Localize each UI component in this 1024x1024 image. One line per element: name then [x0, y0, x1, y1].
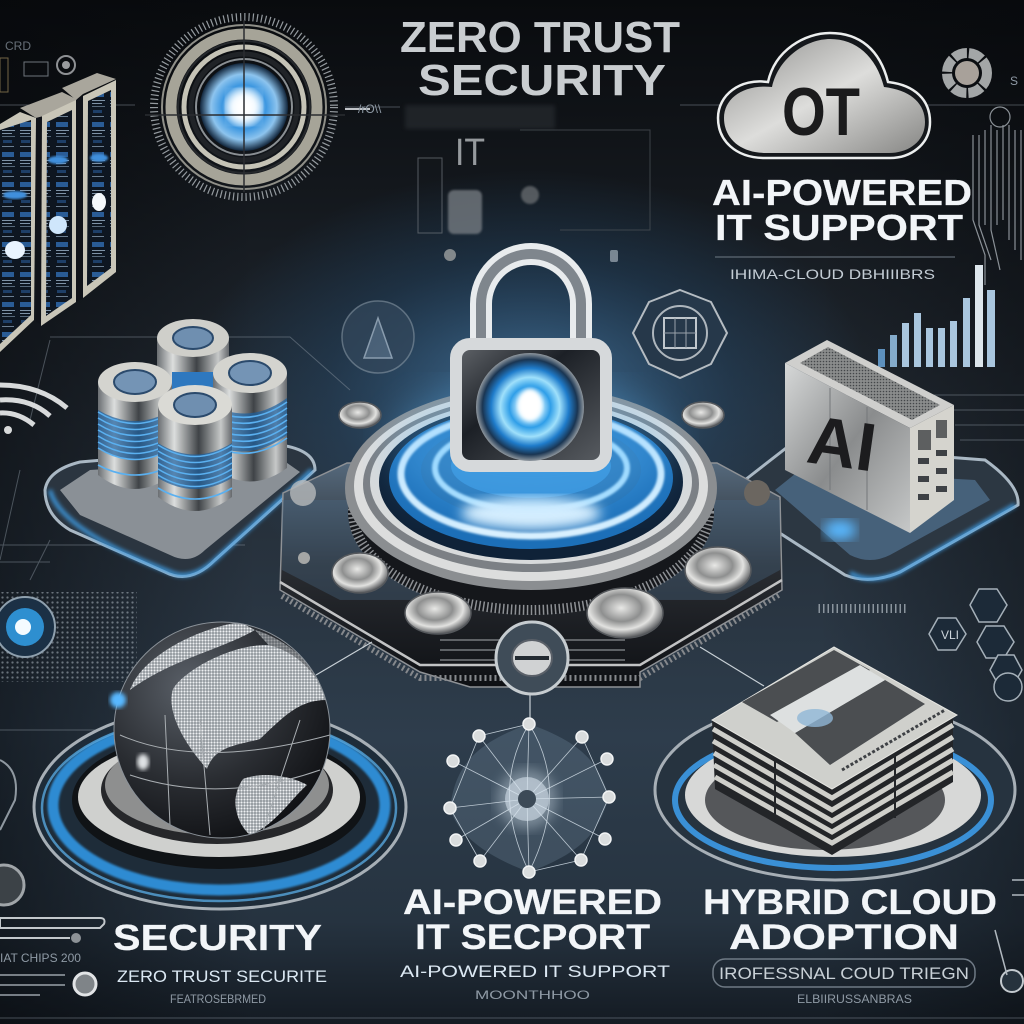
icon: target security eye: /rO\\ [358, 102, 382, 116]
title: Zero Trust Security: ZERO TRUST [400, 13, 680, 62]
hexagon icons [929, 589, 1022, 701]
caption: Hybrid cloud adoption [703, 883, 997, 1006]
bar chart [878, 265, 995, 367]
caption: Security: FEATROSEBRMED [170, 992, 266, 1006]
padlock body [456, 344, 606, 466]
title: Zero Trust Security: SECURITY [418, 56, 666, 105]
concentric rings [345, 385, 717, 614]
stack platform [655, 700, 1015, 880]
cylinder front [158, 385, 232, 511]
cylinder stack [98, 319, 287, 511]
globe platform [34, 705, 406, 909]
caption: AI-powered IT secport: IT SECPORT [415, 918, 650, 957]
caption: AI-powered IT secport: AI-POWERED [403, 883, 662, 922]
hexagon icons: VLI [941, 628, 959, 642]
right AI server platform [745, 445, 1018, 579]
central blue glow [190, 170, 870, 610]
AI server box [785, 340, 954, 533]
faded IT schematic [405, 105, 650, 262]
connector lines [316, 642, 764, 724]
rack 2 [20, 92, 78, 326]
heading: AI-powered IT support [712, 172, 972, 282]
caption: Hybrid cloud adoption: IROFESSNAL COUD TRIEGN [719, 964, 969, 983]
faded IT schematic: IT [455, 132, 485, 174]
left instrument details [0, 760, 104, 995]
left instrument details: IAT CHIPS 200 [0, 951, 81, 965]
caption: AI-powered IT secport [400, 883, 670, 1002]
cylinder right [213, 353, 287, 482]
caption: Hybrid cloud adoption: HYBRID CLOUD [703, 883, 997, 922]
rack 1 [0, 112, 36, 352]
faded shield circle icon [342, 301, 414, 373]
icon: segmented disc [947, 53, 1018, 93]
small diagram top-left: CRD [5, 39, 31, 53]
vertical cable bundle [973, 107, 1021, 285]
cylinder left [98, 362, 172, 489]
lens knob [496, 622, 568, 694]
network diagram [444, 718, 615, 878]
caption: Security [113, 917, 327, 1006]
cylinder back [157, 319, 229, 394]
knobs [332, 402, 751, 638]
caption: Hybrid cloud adoption: ADOPTION [729, 918, 959, 957]
caption: Security: ZERO TRUST SECURITE [117, 967, 327, 986]
caption: AI-powered IT secport: AI-POWERED IT SUPPORT [400, 962, 670, 981]
caption: Hybrid cloud adoption: ELBIIRUSSANBRAS [797, 992, 912, 1006]
icon: wifi [0, 385, 67, 434]
heading: AI-powered IT support: AI-POWERED [712, 172, 972, 213]
faded caption line right: IIIIIIIIIIIIIIIIIIII [817, 601, 907, 616]
caption: Security: SECURITY [113, 917, 322, 958]
globe [110, 622, 330, 840]
heading: AI-powered IT support: IHIMA-CLOUD DBHIIIBRS [730, 266, 935, 282]
dot matrix panel [0, 592, 137, 682]
hexagon base [280, 463, 782, 687]
small diagram top-left [0, 39, 75, 92]
caption: AI-powered IT secport: MOONTHHOO [475, 988, 590, 1002]
server racks [0, 73, 116, 352]
central lock platform [280, 240, 782, 694]
hexagonal lock seal icon [633, 290, 727, 378]
small badge bottom right [995, 880, 1024, 992]
heading: AI-powered IT support: IT SUPPORT [715, 207, 963, 248]
continents [130, 622, 330, 835]
padlock shackle [481, 240, 581, 342]
icon: segmented disc: S [1010, 74, 1018, 88]
left storage platform [45, 445, 315, 576]
AI server box: AI [803, 402, 881, 486]
icon: cloud with OT: OT [782, 74, 860, 150]
title: Zero Trust Security [400, 13, 680, 105]
stacked layers [712, 647, 957, 855]
icon: cloud with OT [718, 33, 930, 158]
icon: target security eye [145, 17, 382, 197]
rack 3 [62, 73, 116, 302]
